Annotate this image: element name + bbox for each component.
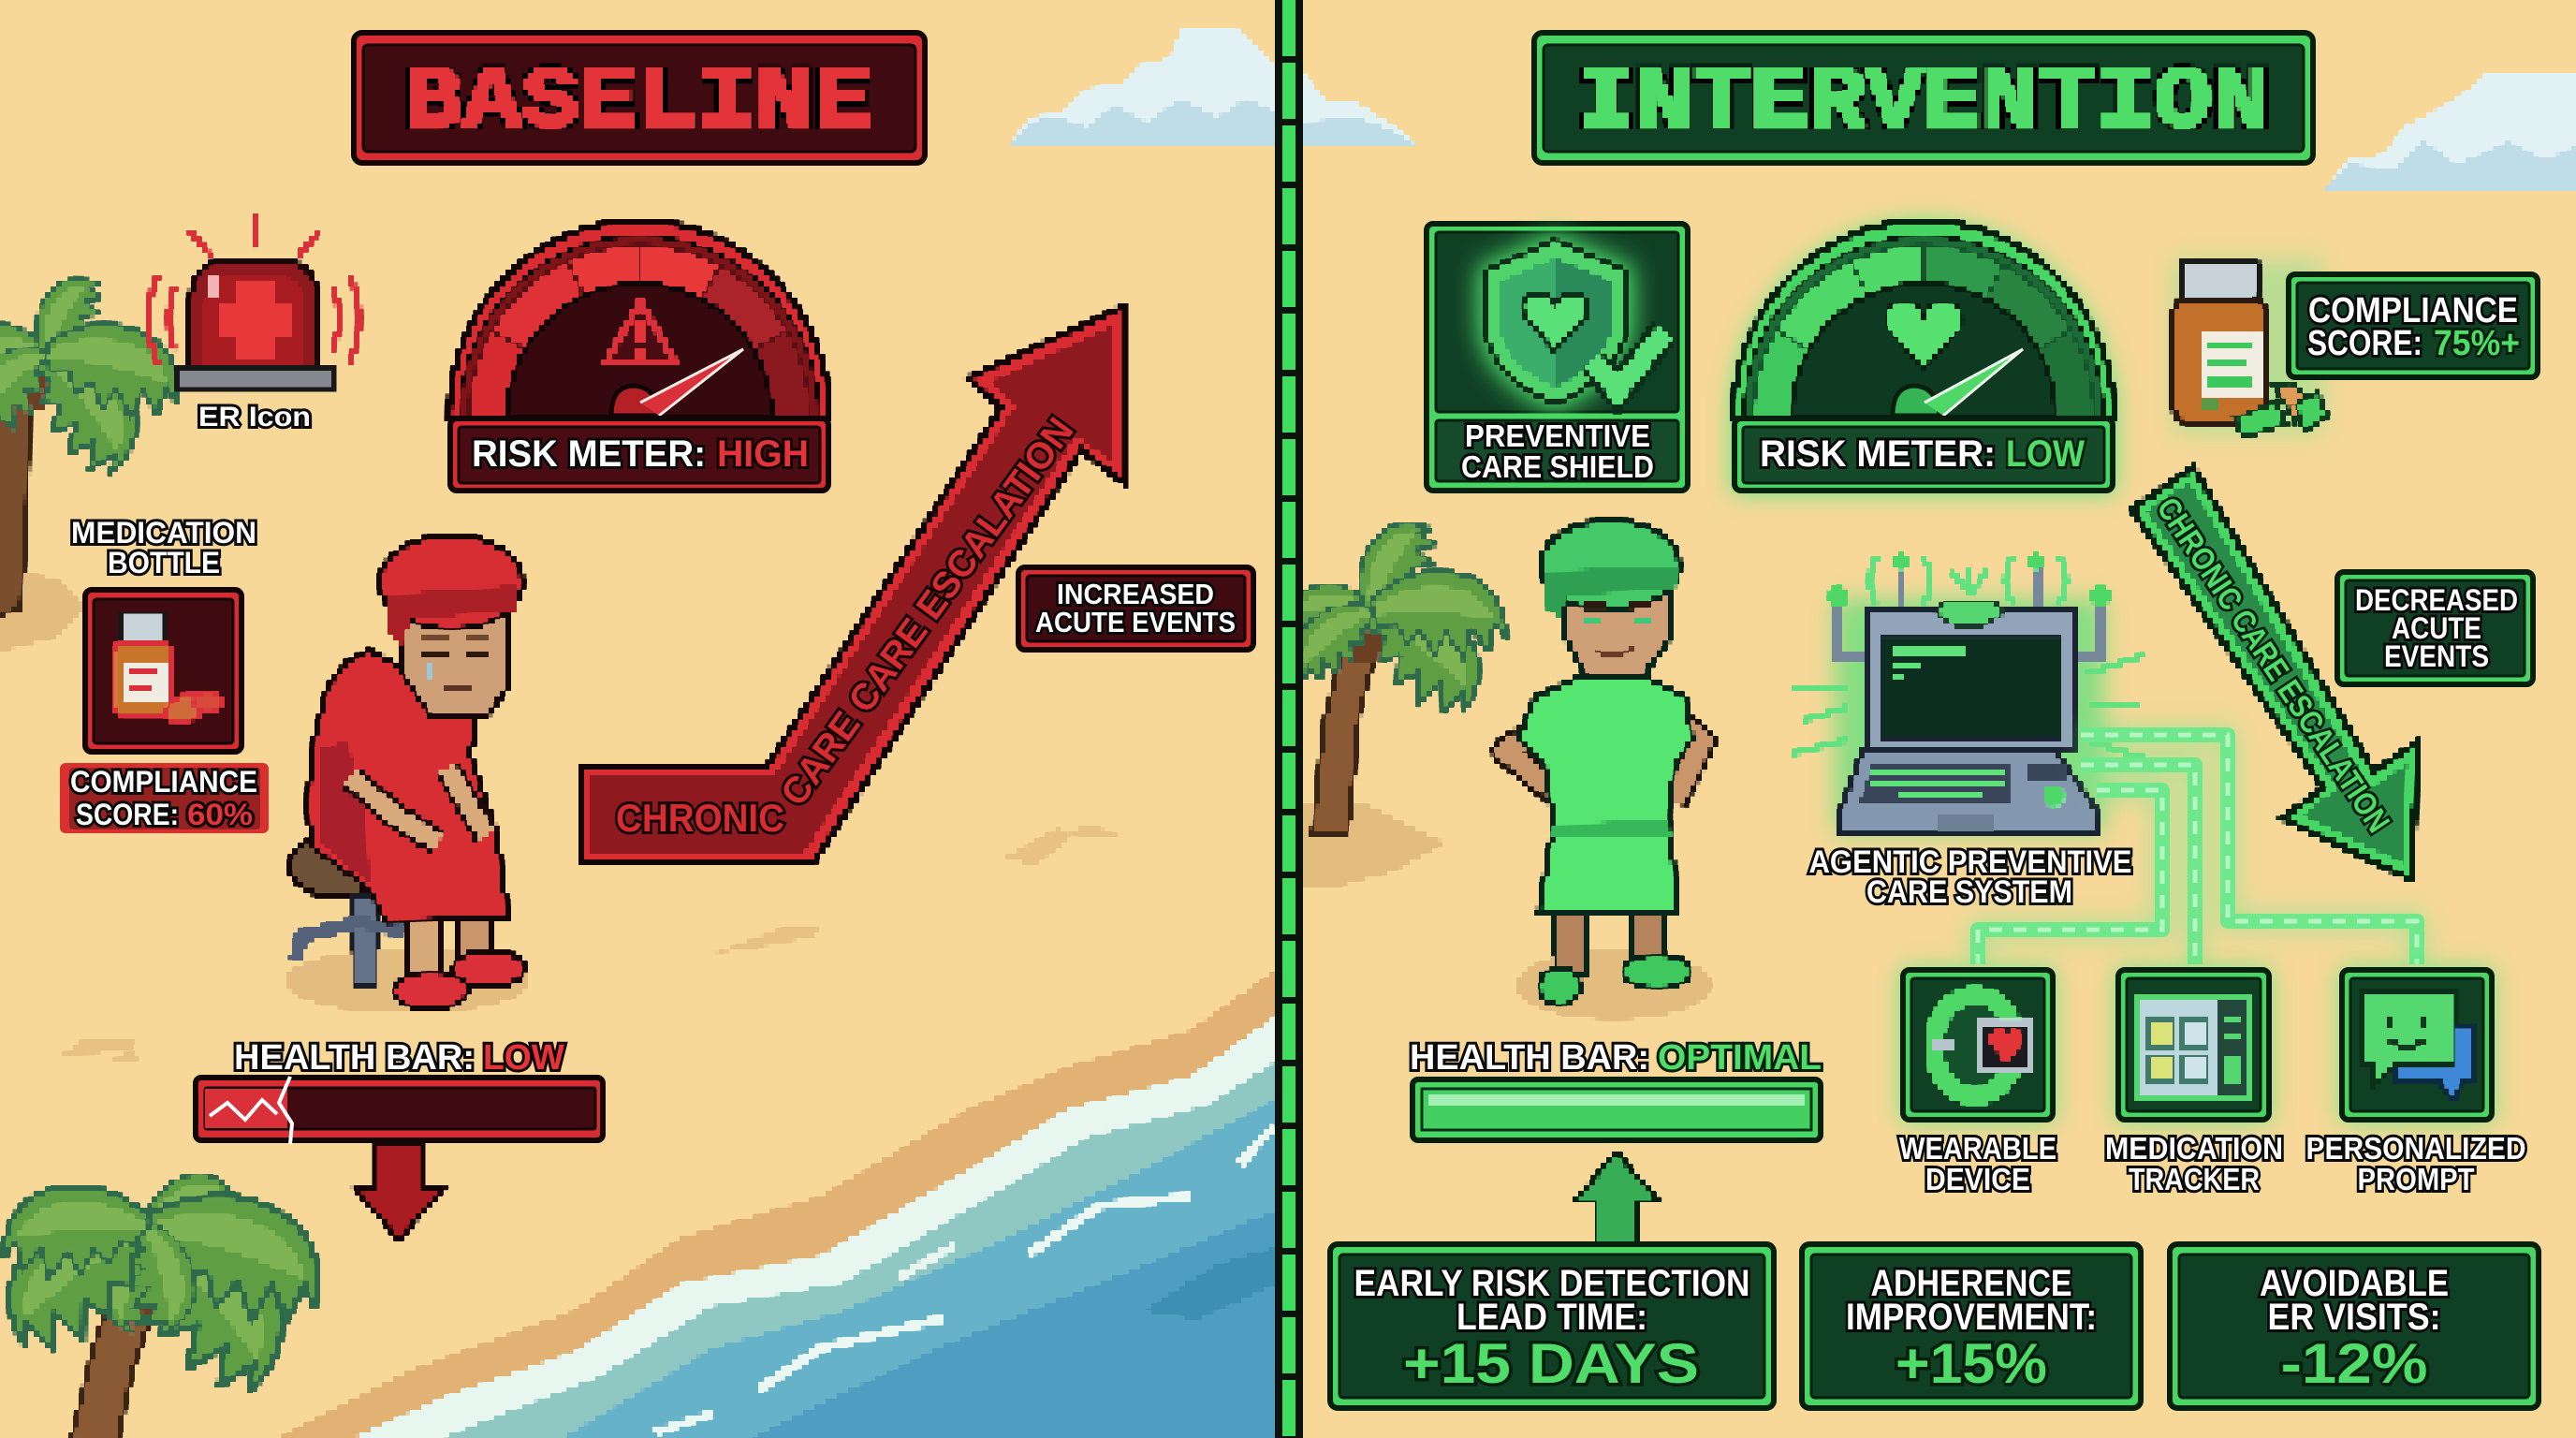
icon: red bottle xyxy=(85,590,242,752)
panel: personalized prompt: PROMPT xyxy=(2357,1162,2475,1196)
label: health bar optimal xyxy=(1410,1038,1822,1078)
health bar: low xyxy=(196,1038,603,1240)
heading: baseline xyxy=(354,33,925,163)
panel: medication tracker xyxy=(2105,967,2283,1196)
icon: tracker screen xyxy=(2138,997,2248,1097)
callout: decreased acute events: EVENTS xyxy=(2384,639,2489,673)
label: compliance score 60: SCORE: xyxy=(76,798,179,831)
label: health bar optimal: HEALTH BAR: xyxy=(1410,1038,1649,1078)
label: agentic preventive care system: AGENTIC PREVENTIVE xyxy=(1808,844,2132,880)
label: medication bottle: BOTTLE xyxy=(108,546,220,580)
label: compliance score 60: COMPLIANCE xyxy=(70,765,257,799)
label: compliance score 60: 60% xyxy=(187,798,253,831)
gauge: risk meter high: RISK METER: xyxy=(472,433,706,475)
label: compliance score 75: SCORE: xyxy=(2307,324,2422,363)
arrow: health improving xyxy=(1575,1152,1658,1242)
stat: avoidable er visits: ER VISITS: xyxy=(2267,1297,2441,1338)
label: compliance score 75: COMPLIANCE xyxy=(2308,291,2518,330)
heading: intervention xyxy=(1534,33,2313,163)
label: compliance score 75 xyxy=(2289,274,2538,377)
gauge: risk meter high: HIGH xyxy=(717,433,809,475)
callout: increased acute events: INCREASED xyxy=(1057,578,1214,610)
connector: circuit traces to devices xyxy=(1978,735,2417,964)
panel: personalized prompt xyxy=(2306,967,2525,1196)
character: sick patient in red gown xyxy=(285,536,530,1013)
icon: shield with heart and check xyxy=(1486,241,1664,404)
label: agentic preventive care system xyxy=(1808,844,2132,910)
gauge: risk meter low: RISK METER: xyxy=(1760,433,1996,475)
icon: chat bubbles xyxy=(2364,992,2474,1100)
panel: medication tracker: MEDICATION xyxy=(2105,1131,2283,1166)
panel: personalized prompt: PERSONALIZED xyxy=(2306,1131,2525,1166)
icon: ER beacon: ER Icon xyxy=(198,402,311,433)
stat: avoidable er visits: -12% xyxy=(2280,1332,2428,1395)
gauge: risk meter low: LOW xyxy=(2006,433,2085,475)
icon: green medication bottle xyxy=(2174,259,2327,437)
center divider xyxy=(1275,0,1303,1438)
gauge: risk meter high xyxy=(449,221,829,491)
label: compliance score 75: 75%+ xyxy=(2434,324,2520,363)
stat: early risk detection lead time: LEAD TIME: xyxy=(1456,1297,1647,1338)
panel: preventive care shield xyxy=(1427,224,1688,491)
palm tree: upper left xyxy=(0,266,187,652)
palm tree: right panel xyxy=(1281,508,1506,888)
needle: high xyxy=(611,349,743,416)
panel: medication tracker: TRACKER xyxy=(2129,1162,2260,1196)
callout: decreased acute events: ACUTE xyxy=(2392,611,2481,645)
callout: increased acute events: ACUTE EVENTS xyxy=(1035,606,1236,638)
label: medication bottle xyxy=(71,516,256,580)
label: medication bottle: MEDICATION xyxy=(71,516,256,550)
arrow: chronic care escalation rising xyxy=(580,307,1123,863)
needle: low xyxy=(1893,349,2023,416)
heading: baseline: BASELINE xyxy=(404,53,872,152)
panel: preventive care shield: PREVENTIVE xyxy=(1465,418,1650,453)
gauge: risk meter low xyxy=(1732,221,2115,493)
icon: smartwatch xyxy=(1932,995,2031,1096)
panel: preventive care shield: CARE SHIELD xyxy=(1461,449,1654,484)
arrow: chronic care escalation rising: CARE CARE ESCALATION xyxy=(773,410,1082,814)
icon: agentic system computer xyxy=(1793,553,2144,833)
stat: avoidable er visits xyxy=(2170,1244,2539,1408)
clouds: right panel xyxy=(1303,71,2576,192)
callout: decreased acute events: DECREASED xyxy=(2355,583,2518,617)
label: compliance score 60 xyxy=(60,763,269,833)
heading: intervention: INTERVENTION xyxy=(1577,53,2270,152)
callout: decreased acute events xyxy=(2337,572,2533,684)
label: health bar optimal: OPTIMAL xyxy=(1658,1038,1822,1078)
panel: medication bottle baseline xyxy=(60,516,269,833)
icon: ER beacon xyxy=(148,215,359,433)
stat: early risk detection lead time xyxy=(1330,1244,1774,1408)
arrow: chronic care escalation falling: CHRONIC CARE ESCALATION xyxy=(2149,492,2396,839)
label: agentic preventive care system: CARE SYSTEM xyxy=(1866,874,2072,910)
stat: adherence improvement xyxy=(1802,1244,2141,1408)
stat: adherence improvement: IMPROVEMENT: xyxy=(1846,1297,2097,1338)
stat: early risk detection lead time: +15 DAYS xyxy=(1403,1332,1699,1395)
bar: full xyxy=(1412,1079,1821,1140)
label: health bar low: LOW xyxy=(483,1038,564,1078)
arrow: health decreasing xyxy=(355,1143,444,1240)
stat: avoidable er visits: AVOIDABLE xyxy=(2260,1263,2449,1304)
callout: increased acute events xyxy=(1018,567,1253,650)
panel: wearable device: WEARABLE xyxy=(1899,1131,2056,1166)
bar: nearly empty xyxy=(196,1077,603,1144)
label: health bar low: HEALTH BAR: xyxy=(234,1038,475,1078)
stat: early risk detection lead time: EARLY RISK DETECTION xyxy=(1354,1263,1750,1304)
health bar: optimal xyxy=(1410,1038,1822,1242)
stat: adherence improvement: ADHERENCE xyxy=(1870,1263,2072,1304)
panel: wearable device xyxy=(1899,967,2056,1196)
clouds: left panel xyxy=(1010,28,1281,144)
character: healthy patient in green gown xyxy=(1505,521,1711,1020)
palm tree: lower left xyxy=(0,1159,335,1438)
beach and sea xyxy=(61,824,1281,1438)
arrow: chronic care escalation rising: CHRONIC xyxy=(616,796,784,840)
panel: wearable device: DEVICE xyxy=(1925,1162,2030,1196)
stat: adherence improvement: +15% xyxy=(1895,1332,2047,1395)
